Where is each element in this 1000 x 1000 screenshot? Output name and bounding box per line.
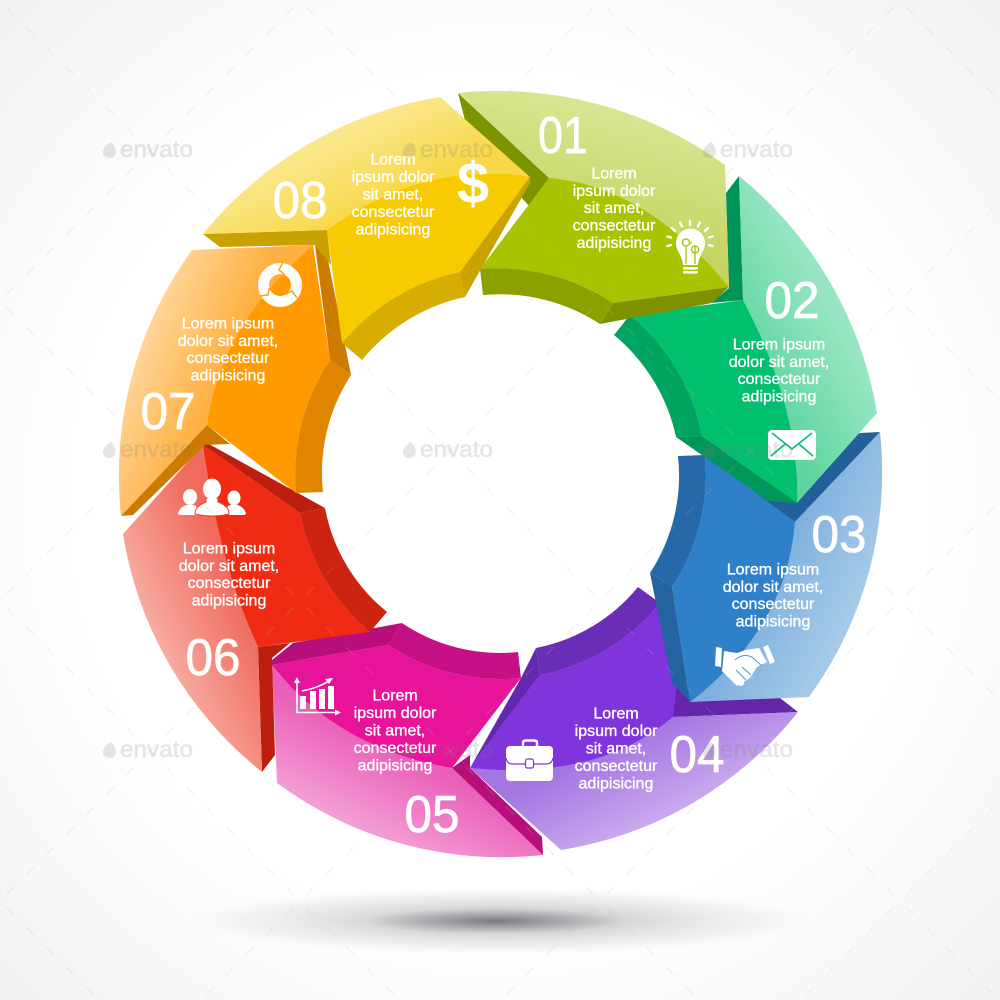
text block 04: adipisicing [579, 776, 653, 792]
text block 04: consectetur [575, 758, 658, 775]
number 01: 01 [538, 107, 588, 165]
watermarks: envato grid: envato [420, 736, 493, 762]
text block 06: consectetur [188, 575, 271, 592]
icon: light bulb [668, 221, 712, 274]
segment 06: red arrow [123, 443, 387, 772]
text block 01: adipisicing [577, 235, 651, 252]
text block 04: ipsum dolor [575, 723, 658, 740]
text block 02: dolor sit amet, [729, 354, 829, 371]
text block 03: adipisicing [736, 614, 810, 630]
watermarks: envato grid: envato [120, 136, 193, 162]
text block 03: consectetur [732, 596, 815, 613]
watermarks: envato grid: envato [420, 436, 493, 462]
text block 07: Lorem ipsum [182, 316, 274, 332]
segment 01: lime arrow [458, 91, 729, 324]
segment 05: magenta arrow [272, 623, 543, 857]
watermarks: envato grid: envato [720, 436, 793, 462]
text block 05: consectetur [354, 740, 437, 757]
text block 08: sit amet, [363, 186, 423, 204]
text block 06: dolor sit amet, [179, 558, 279, 575]
segment 03: blue arrow [650, 432, 882, 702]
text block 01: ipsum dolor [573, 183, 656, 200]
number 07: 07 [140, 383, 196, 441]
text block 07: consectetur [187, 350, 270, 367]
text block 03: dolor sit amet, [723, 579, 823, 596]
icon: handshake [715, 645, 775, 686]
watermarks: envato grid [103, 136, 793, 762]
segment 08: yellow arrow [203, 97, 530, 360]
number 03: 03 [812, 506, 866, 564]
text block 01: sit amet, [584, 200, 644, 217]
watermarks: envato grid: envato [420, 136, 493, 162]
text block 07: dolor sit amet, [178, 333, 278, 350]
ground shadow [180, 887, 820, 955]
icon: briefcase [506, 740, 553, 781]
watermarks: envato grid: envato [120, 436, 193, 462]
text block 05: sit amet, [365, 722, 425, 740]
icon: envelope [768, 430, 816, 460]
text block 06: Lorem ipsum [183, 540, 275, 558]
icon: cycle arrows [260, 262, 297, 302]
number 05: 05 [404, 786, 460, 844]
text block 08: adipisicing [356, 222, 430, 238]
number 06: 06 [186, 629, 240, 687]
text block 02: Lorem ipsum [733, 336, 825, 354]
segment 02: green arrow [614, 176, 877, 503]
icon: group of people [178, 478, 246, 516]
icon: dollar sign: $ [457, 151, 489, 216]
watermarks: envato grid: envato [120, 736, 193, 762]
text block 05: ipsum dolor [354, 705, 437, 722]
text block 03: Lorem ipsum [727, 562, 819, 578]
text block 08: ipsum dolor [352, 169, 435, 186]
segment 04: purple arrow [470, 587, 798, 850]
number 04: 04 [670, 726, 724, 784]
text block 06: adipisicing [192, 592, 266, 610]
number 08: 08 [272, 172, 328, 230]
text block 01: Lorem [591, 166, 637, 182]
watermarks: envato grid: envato [720, 736, 793, 762]
icon: bar chart [294, 677, 341, 716]
text block 08: consectetur [352, 204, 435, 221]
watermarks: envato grid: envato [720, 136, 793, 162]
text block 08: Lorem [370, 152, 416, 168]
text block 01: consectetur [573, 218, 656, 234]
text block 02: consectetur [738, 371, 821, 388]
text block 05: adipisicing [358, 758, 432, 774]
text block 04: Lorem [593, 706, 639, 722]
text block 05: Lorem [372, 688, 418, 704]
text block 07: adipisicing [191, 368, 265, 384]
number 02: 02 [764, 272, 820, 330]
text block 04: sit amet, [586, 740, 646, 758]
text block 02: adipisicing [742, 388, 816, 406]
segment 07: orange arrow [119, 245, 351, 516]
